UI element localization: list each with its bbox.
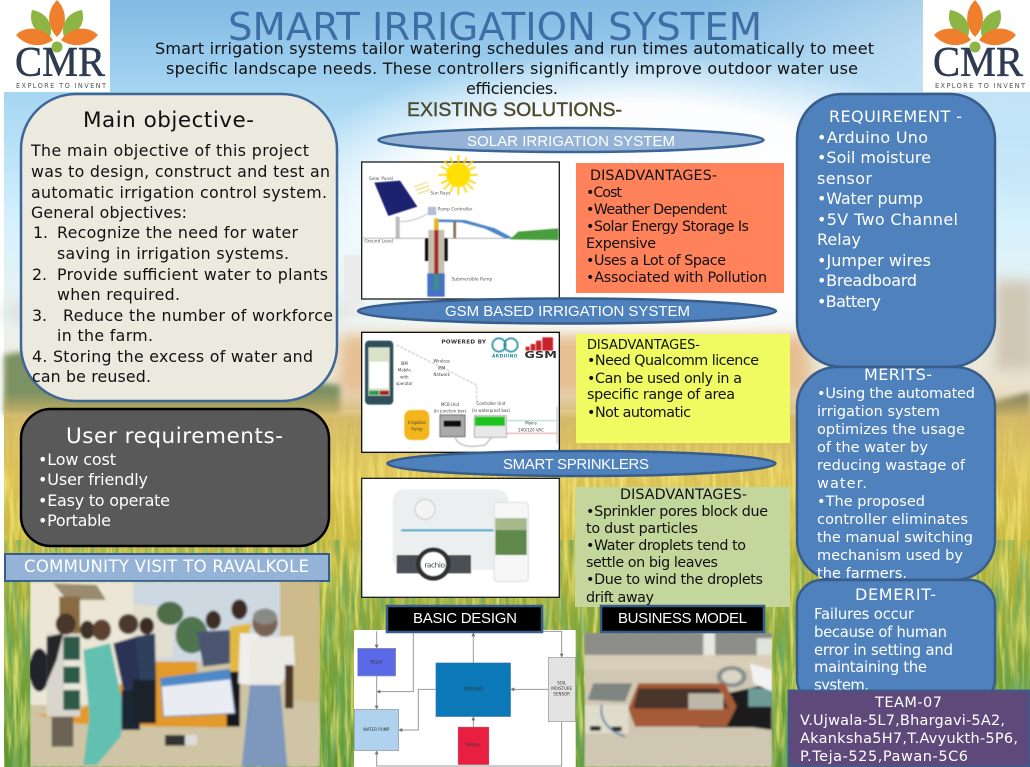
panel: sprinkler disadvantages: settle on big leaves [586, 555, 718, 571]
image: GSM irrigation: Pump [411, 427, 423, 432]
banner: solar irrigation system [378, 128, 764, 152]
objective text: 3. [32, 306, 47, 325]
panel: requirement: •Battery [817, 292, 881, 311]
panel: solar disadvantages: •Weather Dependent [586, 202, 727, 218]
photo: community visit [29, 582, 320, 767]
panel: merits: mechanism used by [817, 548, 963, 564]
panel: merits: irrigation system [817, 404, 940, 420]
image: GSM irrigation: Wireless [433, 359, 450, 364]
image: GSM irrigation: GSM [524, 350, 557, 361]
logo: CMR right: CMR [933, 40, 1023, 86]
panel: team: V.Ujwala-5L7,Bhargavi-5A2, [800, 713, 1005, 729]
image: GSM irrigation: IBM [401, 361, 409, 366]
diagram: basic design block diagram: ARDUINO [464, 686, 483, 691]
diagram: basic design block diagram: SOIL [557, 681, 567, 686]
label: business model [601, 606, 764, 632]
panel: GSM disadvantages: •Can be used only in a [587, 371, 742, 387]
image: GSM irrigation: POWERED BY [441, 340, 487, 346]
panel: requirement: sensor [817, 169, 872, 188]
panel: demerit: Failures occur [814, 606, 915, 623]
diagram: basic design block diagram [354, 630, 576, 767]
diagram: basic design block diagram: SENSOR [553, 692, 570, 697]
list: user requirements: •Portable [38, 511, 111, 530]
panel: solar disadvantages: DISADVANTAGES- [590, 168, 717, 184]
diagram: basic design block diagram: WATER PUMP [363, 727, 390, 732]
panel: requirement: •Arduino Uno [817, 128, 928, 147]
heading: user requirements: User requirements- [66, 424, 283, 449]
label: business model: BUSINESS MODEL [618, 610, 747, 627]
image: solar irrigation: Pump Controller [438, 207, 473, 213]
panel: GSM disadvantages [576, 334, 790, 443]
image: GSM irrigation: with [400, 374, 409, 379]
banner: solar irrigation system: SOLAR IRRIGATION SYSTEM [467, 133, 675, 150]
panel: team: Akanksha5H7,T.Avyukth-5P6, [800, 731, 1018, 747]
image: smart sprinkler [362, 478, 559, 597]
label: basic design: BASIC DESIGN [413, 610, 517, 627]
panel: requirement: •5V Two Channel [817, 210, 958, 229]
panel: solar disadvantages: •Uses a Lot of Space [586, 253, 726, 269]
logo: CMR left: CMR [15, 40, 105, 86]
panel: requirement: •Breadboard [817, 271, 917, 290]
panel: demerit: because of human [814, 624, 947, 641]
objective text: in the farm. [57, 326, 153, 345]
image: GSM irrigation: 240/120 VAC [518, 427, 544, 432]
panel: sprinkler disadvantages: drift away [586, 590, 655, 606]
image: GSM irrigation: (in junction box) [434, 409, 467, 414]
panel: demerit [797, 580, 995, 704]
banner: GSM based irrigation system [358, 298, 776, 324]
panel: merits: the farmers. [817, 566, 907, 582]
banner: smart sprinklers: SMART SPRINKLERS [503, 456, 649, 473]
heading: community visit [5, 554, 329, 581]
panel: team [788, 690, 1030, 766]
panel: merits: reducing wastage of [817, 458, 966, 474]
intro text: Smart irrigation systems tailor watering schedules and run times automatically to meet [155, 39, 874, 58]
panel: GSM disadvantages: •Need Qualcomm licence [587, 353, 759, 369]
list: user requirements [38, 450, 170, 530]
objective text: The main objective of this project [30, 141, 309, 160]
banner: smart sprinklers [388, 451, 776, 476]
image: GSM irrigation: Mains [525, 421, 537, 426]
diagram: basic design block diagram: RELAY [370, 659, 383, 664]
panel: merits: optimizes the usage [817, 422, 965, 438]
intro text: specific landscape needs. These controllers significantly improve outdoor water use [166, 59, 858, 78]
image: GSM irrigation: Controller Unit [477, 401, 506, 406]
heading: main objective: Main objective- [83, 108, 254, 133]
panel: sprinkler disadvantages [575, 487, 790, 607]
logo: CMR right [923, 0, 1030, 92]
panel: GSM disadvantages: DISADVANTAGES- [587, 338, 700, 353]
panel: sprinkler disadvantages: •Due to wind the droplets [586, 572, 763, 588]
logo: CMR right: EXPLORE TO INVENT [935, 82, 1026, 90]
list: user requirements: •User friendly [38, 470, 148, 489]
objective text: when required. [57, 285, 180, 304]
panel: sprinkler disadvantages: •Sprinkler pores block due [586, 504, 768, 520]
panel: GSM disadvantages: specific range of area [587, 387, 735, 403]
panel: merits: •The proposed [817, 494, 925, 510]
image: GSM irrigation: operator [396, 381, 413, 386]
diagram: basic design block diagram: Battery [466, 742, 481, 747]
panel: solar disadvantages: •Solar Energy Storage Is [586, 219, 749, 235]
image: GSM irrigation: Network [433, 372, 451, 377]
panel: sprinkler disadvantages: DISADVANTAGES- [620, 487, 747, 503]
banner: GSM based irrigation system: GSM BASED IRRIGATION SYSTEM [445, 303, 690, 320]
panel: requirement: •Jumper wires [817, 251, 931, 270]
panel: GSM disadvantages: •Not automatic [587, 405, 691, 421]
panel: team: P.Teja-525,Pawan-5C6 [800, 749, 968, 765]
objective text: 2. [32, 265, 47, 284]
panel: demerit: DEMERIT- [855, 585, 936, 604]
panel: demerit: error in setting and [814, 642, 953, 659]
panel: merits: •Using the automated [817, 386, 975, 402]
objective text: can be reused. [32, 367, 151, 386]
objective text: General objectives: [31, 203, 187, 222]
intro text: efficiencies. [466, 79, 558, 98]
panel: solar disadvantages: •Cost [586, 185, 622, 201]
panel: solar disadvantages: •Associated with Pollution [586, 270, 767, 286]
panel: main objective [21, 94, 337, 401]
panel: sprinkler disadvantages: to dust particles [586, 521, 698, 537]
image: GSM irrigation: MCB Unit [441, 402, 460, 407]
image: GSM irrigation [362, 332, 559, 452]
list: user requirements: •Low cost [38, 450, 116, 469]
panel: merits: MERITS- [864, 365, 932, 384]
photo: business model [584, 633, 772, 767]
panel: requirement [797, 94, 995, 367]
logo: CMR left: EXPLORE TO INVENT [16, 82, 107, 90]
image: GSM irrigation: ARDUINO [492, 353, 518, 359]
panel: requirement: Relay [817, 230, 861, 249]
objective text: 1. [33, 223, 48, 242]
panel: merits: water. [817, 476, 867, 492]
panel: merits: controller eliminates [817, 512, 968, 528]
diagram: basic design block diagram: MOISTURE [551, 686, 573, 691]
objective text [30, 141, 333, 386]
image: solar irrigation: Sun Rays [430, 190, 451, 196]
panel: sprinkler disadvantages: •Water droplets tend to [586, 538, 746, 554]
objective text: Reduce the number of workforce [63, 306, 333, 325]
objective text: was to design, construct and test an [31, 162, 330, 181]
image: GSM irrigation: (in waterproof box) [472, 408, 511, 413]
panel: requirement: •Soil moisture [817, 148, 931, 167]
objective text: Recognize the need for water [57, 223, 298, 242]
image: GSM irrigation: Irrigation [408, 420, 427, 425]
panel: solar disadvantages [576, 163, 784, 293]
image: solar irrigation [362, 155, 559, 299]
intro text [155, 39, 874, 98]
panel: merits [797, 365, 995, 582]
panel: team: TEAM-07 [874, 695, 942, 711]
list: user requirements: •Easy to operate [38, 491, 170, 510]
panel: requirement: •Water pump [817, 189, 923, 208]
panel: demerit: system. [814, 677, 869, 694]
image: solar irrigation: Submersible Pump [452, 276, 493, 282]
image: solar irrigation: Solar Panel [369, 176, 393, 182]
logo: CMR left [0, 0, 110, 92]
panel: merits: of the water by [817, 440, 928, 456]
panel: demerit: maintaining the [814, 659, 927, 676]
image: smart sprinkler: rachio [424, 560, 446, 569]
panel: merits: the manual switching [817, 530, 973, 546]
image: GSM irrigation: IBM [438, 365, 446, 370]
objective text: saving in irrigation systems. [57, 244, 289, 263]
panel: solar disadvantages: Expensive [586, 236, 656, 252]
title: SMART IRRIGATION SYSTEM [228, 5, 762, 49]
label: basic design [387, 606, 542, 632]
image: GSM irrigation: Mobile [398, 368, 411, 373]
heading: existing solutions: EXISTING SOLUTIONS- [407, 99, 622, 121]
objective text: Provide sufficient water to plants [57, 265, 328, 284]
objective text: automatic irrigation control system. [31, 183, 327, 202]
panel: requirement: REQUIREMENT - [829, 107, 962, 126]
objective text: 4. Storing the excess of water and [32, 347, 313, 366]
panel: user requirements [21, 409, 329, 546]
image: solar irrigation: Ground Level [364, 239, 393, 245]
heading: community visit: COMMUNITY VISIT TO RAVALKOLE [24, 557, 309, 576]
